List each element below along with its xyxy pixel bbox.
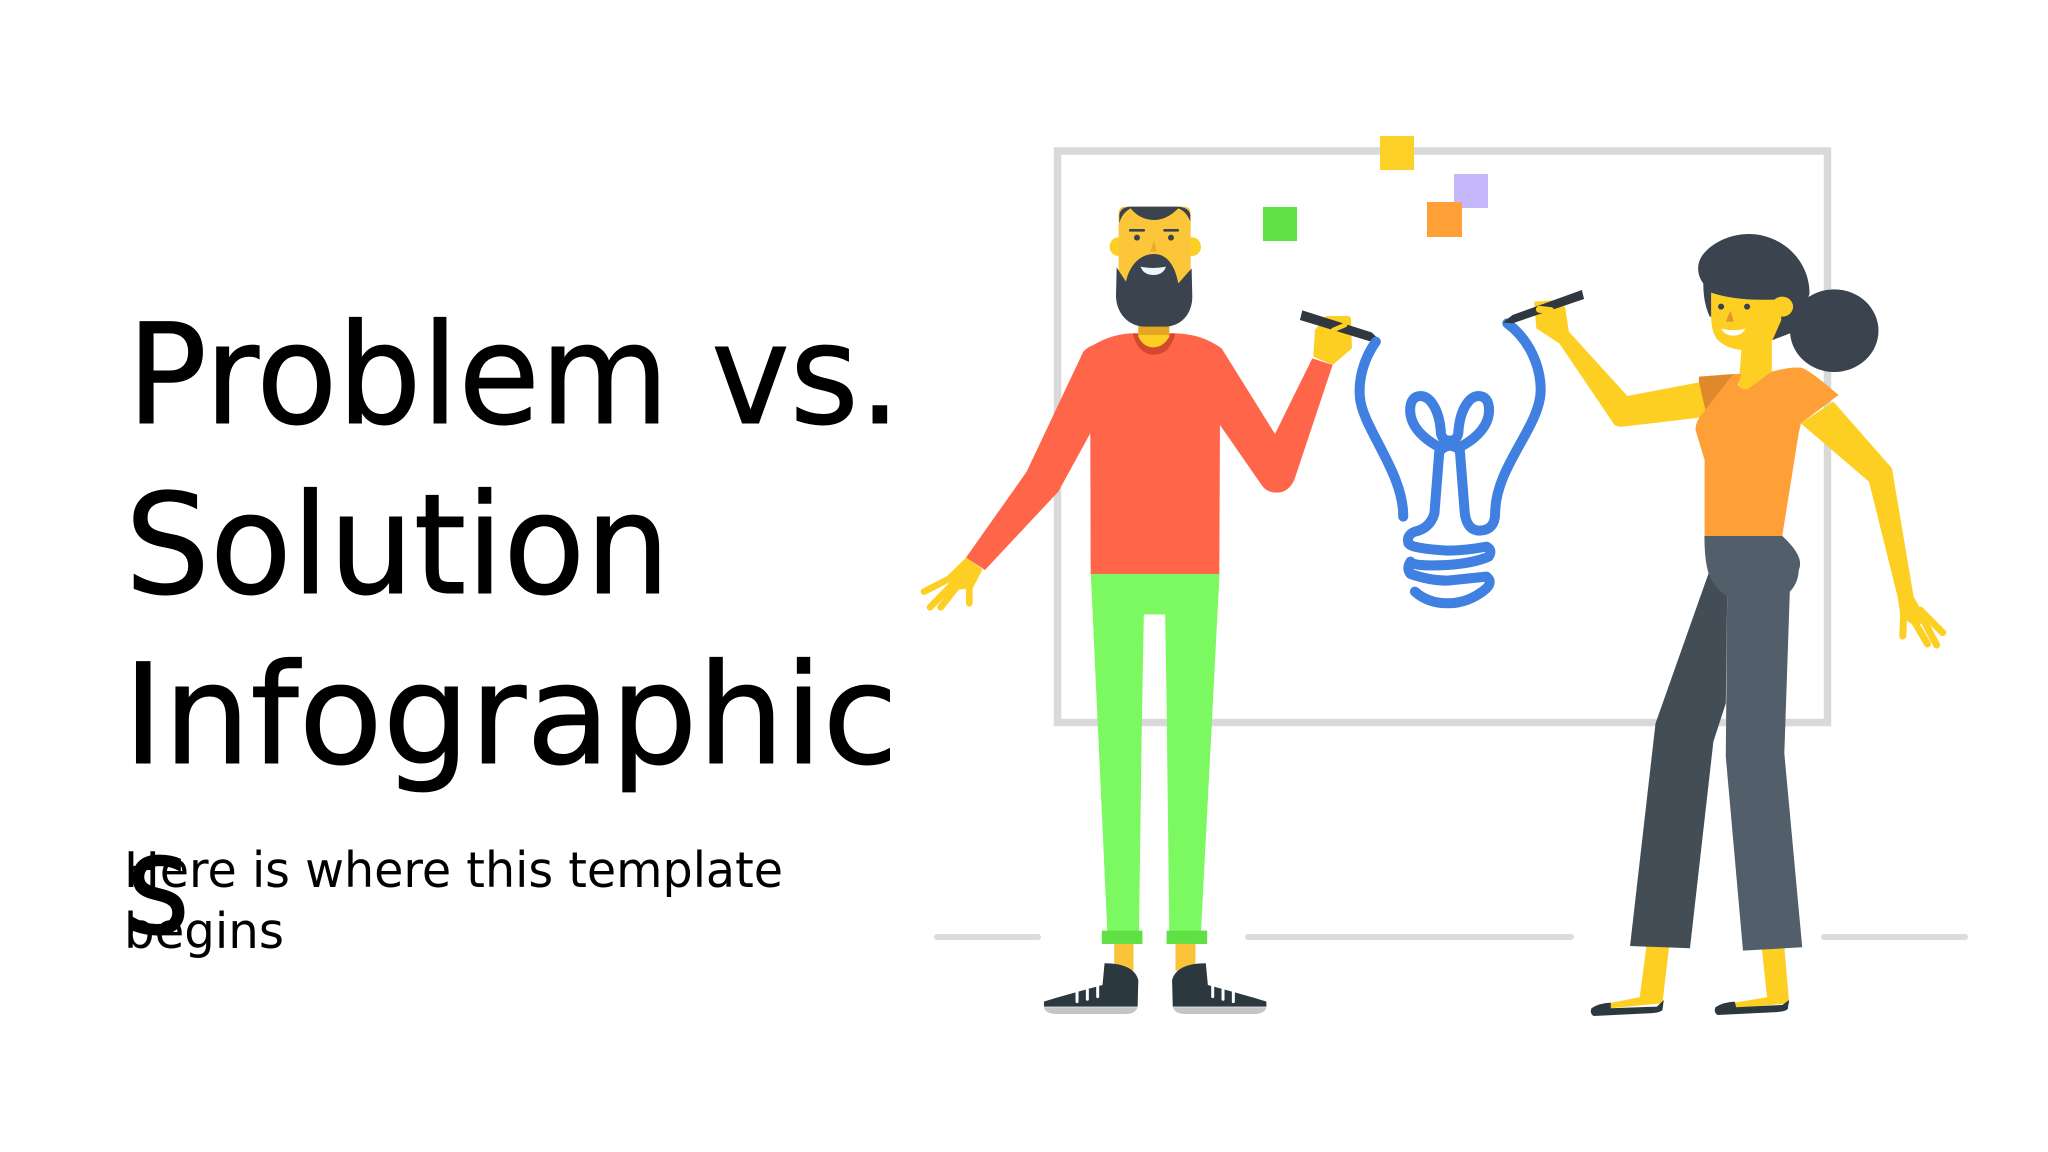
subtitle: Here is where this template: [124, 842, 783, 899]
man legs and shoes: [1044, 573, 1266, 1014]
sticky notes: [1263, 136, 1488, 241]
woman upper body: [1503, 234, 1943, 645]
title: [123, 294, 901, 966]
woman right arm and hand: [1801, 402, 1943, 645]
man head: [1110, 207, 1201, 327]
title: s: [126, 804, 190, 966]
title: Infographic: [123, 634, 898, 796]
woman hair: [1698, 234, 1878, 372]
woman figure: [1503, 234, 1943, 1016]
whiteboard: [1058, 151, 1828, 722]
subtitle: [124, 842, 783, 960]
light bulb drawing: [1360, 323, 1541, 603]
man figure: [924, 207, 1381, 1014]
floor line segments: [934, 934, 1968, 940]
man upper body: [924, 207, 1381, 607]
woman face and neck: [1711, 293, 1793, 393]
man lower hand: [924, 558, 983, 607]
woman marker: [1503, 290, 1584, 323]
woman shirt: [1534, 300, 1839, 536]
man raised hand with marker: [1300, 310, 1381, 365]
title: Problem vs.: [127, 294, 901, 456]
woman legs and shoes: [1591, 536, 1802, 1016]
title: Solution: [125, 464, 670, 626]
subtitle: begins: [124, 903, 284, 960]
